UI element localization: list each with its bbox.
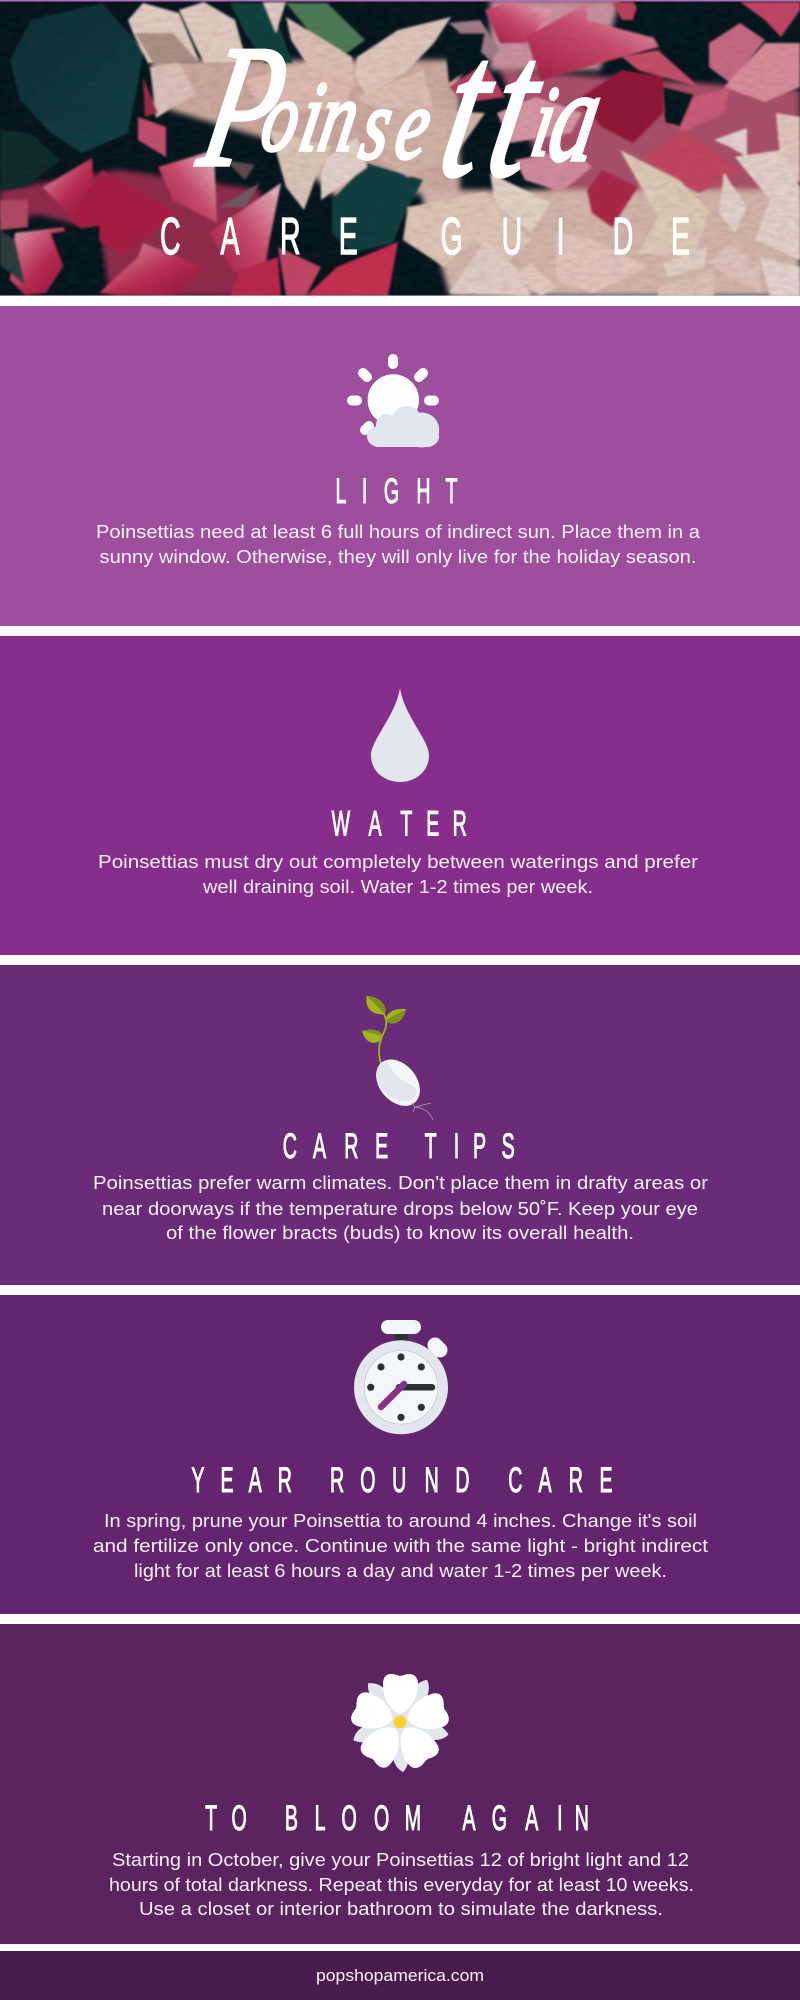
title: Poinsettia: P — [187, 11, 301, 204]
text block: light: Poinsettias need at least 6 full hours of indirect sun. Place them in a — [96, 521, 701, 542]
text block: care tips: of the flower bracts (buds) to know its overall health. — [166, 1222, 634, 1243]
text block: care tips — [93, 1172, 708, 1243]
text block: water — [98, 851, 698, 897]
text block: light: sunny window. Otherwise, they will only live for the holiday season. — [100, 546, 696, 567]
text block: to bloom again: Starting in October, give your Poinsettias 12 of bright light and 12 — [112, 1849, 689, 1870]
text block: year round care: and fertilize only once. Continue with the same light - bright indirect — [93, 1535, 708, 1556]
text block: to bloom again: Use a closet or interior bathroom to simulate the darkness. — [139, 1898, 663, 1919]
text block: light — [96, 521, 701, 567]
hero photo: layered leaves — [0, 0, 800, 296]
panel: care tips — [0, 965, 800, 1285]
panel background: water — [0, 636, 800, 955]
panel: water — [0, 636, 800, 955]
hero: poinsettia photo header — [0, 0, 800, 296]
title: Poinsettia: t — [474, 0, 560, 218]
text block: year round care — [93, 1510, 708, 1581]
footer — [0, 1951, 800, 2000]
icon: water drop — [371, 688, 429, 782]
panel background: year round care — [0, 1295, 800, 1614]
panel: year round care — [0, 1295, 800, 1614]
text block: water: well draining soil. Water 1-2 times per week. — [202, 876, 593, 897]
text block: year round care: light for at least 6 hours a day and water 1-2 times per week. — [134, 1560, 667, 1581]
icon: sprouting seed — [362, 996, 433, 1120]
title: Poinsettia: o — [253, 61, 311, 172]
text block: care tips: Poinsettias prefer warm climates. Don't place them in drafty areas or — [93, 1172, 708, 1193]
icon: stopwatch — [354, 1320, 448, 1434]
heading: light: LIGHT — [336, 472, 457, 512]
heading: to bloom again: TO BLOOM AGAIN — [205, 1799, 589, 1839]
text block: water: Poinsettias must dry out completely between waterings and prefer — [98, 851, 698, 872]
panel: to bloom again — [0, 1624, 800, 1944]
title: Poinsettia: s — [353, 69, 402, 180]
footer background — [0, 1951, 800, 2000]
title: Poinsettia: a — [539, 45, 613, 189]
text block: to bloom again — [109, 1849, 694, 1919]
footer website text: popshopamerica.com — [316, 1967, 484, 1985]
panel background: care tips — [0, 965, 800, 1285]
heading: water: WATER — [332, 804, 467, 844]
icon: white flower — [349, 1674, 451, 1772]
title: Poinsettia: i — [524, 66, 566, 177]
heading: year round care: YEAR ROUND CARE — [191, 1461, 613, 1501]
title: Poinsettia: t — [426, 0, 513, 218]
title: Poinsettia: e — [388, 69, 441, 180]
text block: to bloom again: hours of total darkness. Repeat this everyday for at least 10 weeks. — [109, 1874, 694, 1895]
title: Poinsettia: i — [292, 61, 333, 172]
heading: care tips: CARE TIPS — [283, 1127, 515, 1167]
icon: sun behind cloud — [352, 359, 439, 448]
panel background: to bloom again — [0, 1624, 800, 1944]
subtitle: Care Guide: CARE GUIDE — [160, 207, 690, 265]
panel background: light — [0, 306, 800, 626]
title: Poinsettia: n — [311, 61, 369, 172]
text block: year round care: In spring, prune your Poinsettia to around 4 inches. Change it's soil — [104, 1510, 697, 1531]
panel: light — [0, 306, 800, 626]
text block: care tips: near doorways if the temperature drops below 50˚F. Keep your eye — [102, 1198, 698, 1219]
